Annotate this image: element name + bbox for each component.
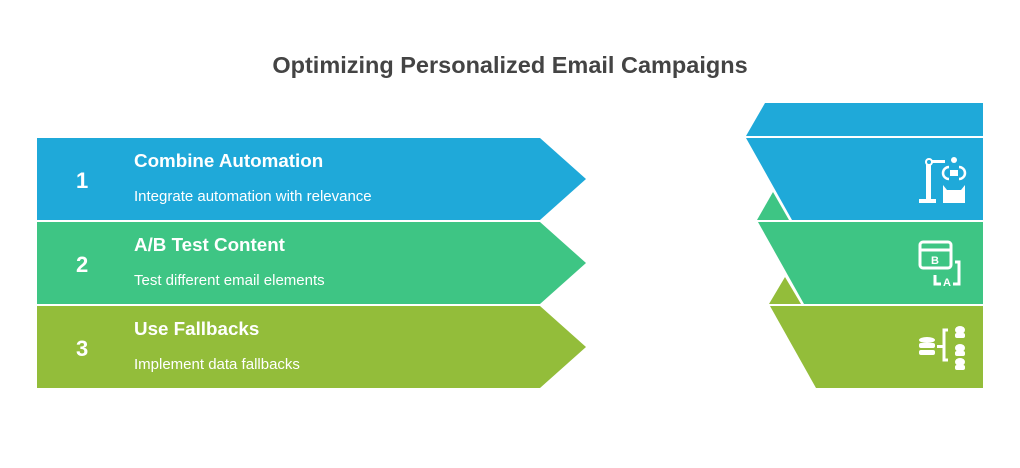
number 3: 3 [76, 336, 88, 361]
heading 1: Combine Automation [134, 150, 323, 171]
right band blue [746, 138, 983, 220]
arrow 1 [37, 138, 586, 220]
right band olive [770, 306, 983, 388]
text 1: Integrate automation with relevance [134, 188, 372, 205]
icon: robot arm with person [919, 157, 965, 203]
text 3: Implement data fallbacks [134, 356, 300, 373]
olive triangle [769, 277, 801, 304]
icon: A/B test: A [943, 277, 951, 289]
icon: database fallbacks [919, 326, 965, 370]
heading 3: Use Fallbacks [134, 318, 259, 339]
icon: A/B test: B [931, 255, 939, 267]
number 2: 2 [76, 252, 88, 277]
arrow 2 [37, 222, 586, 304]
heading 2: A/B Test Content [134, 234, 285, 255]
icon: A/B test [920, 242, 959, 289]
number 1: 1 [76, 168, 88, 193]
green triangle [757, 192, 789, 220]
right top cap [746, 103, 983, 136]
right band green [758, 222, 983, 304]
arrow 3 [37, 306, 586, 388]
title: Optimizing Personalized Email Campaigns [272, 52, 748, 78]
text 2: Test different email elements [134, 272, 325, 289]
